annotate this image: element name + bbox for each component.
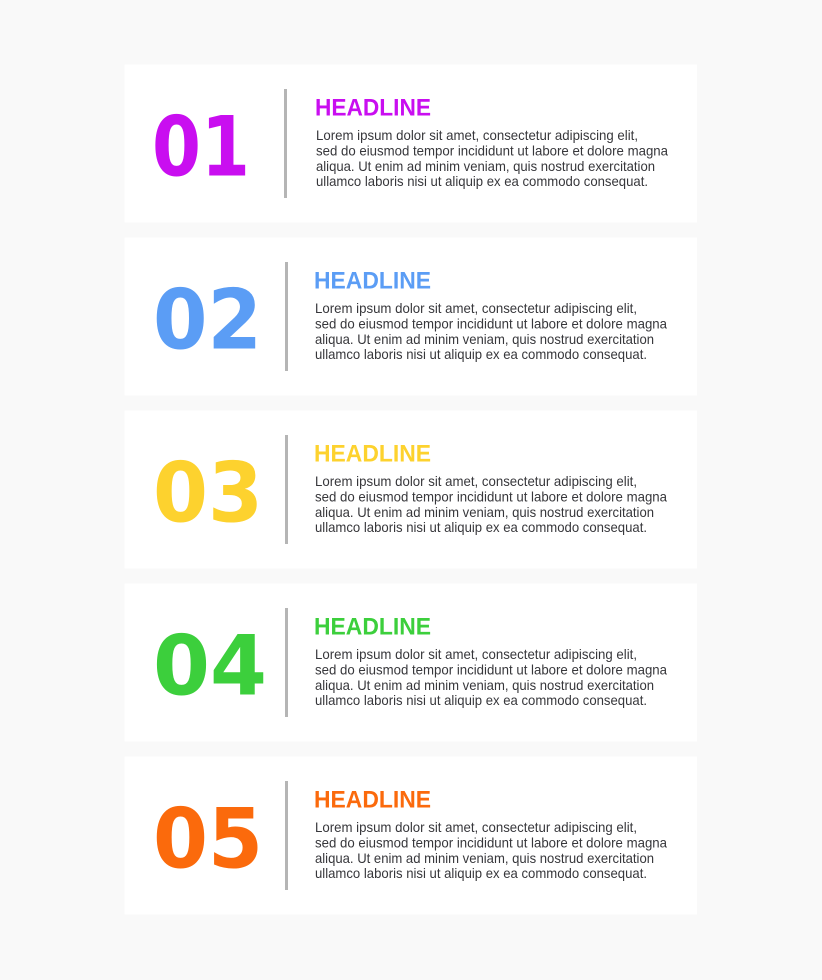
body text: ullamco laboris nisi ut aliquip ex ea commodo consequat. bbox=[315, 693, 647, 708]
number 04: 04 bbox=[153, 618, 267, 714]
body text: sed do eiusmod tempor incididunt ut labore et dolore magna bbox=[315, 836, 667, 850]
vertical divider bbox=[285, 435, 288, 544]
panel: step 02 bbox=[124, 238, 697, 396]
body text: ullamco laboris nisi ut aliquip ex ea commodo consequat. bbox=[315, 866, 647, 881]
panel: step 01 bbox=[124, 64, 697, 222]
headline: HEADLINE bbox=[314, 614, 431, 640]
body text: Lorem ipsum dolor sit amet, consectetur adipiscing elit, bbox=[315, 820, 637, 835]
body text: ullamco laboris nisi ut aliquip ex ea commodo consequat. bbox=[316, 174, 648, 189]
body text: aliqua. Ut enim ad minim veniam, quis nostrud exercitation bbox=[316, 159, 655, 174]
body text: sed do eiusmod tempor incididunt ut labore et dolore magna bbox=[315, 316, 667, 332]
panel: step 05 bbox=[124, 756, 697, 914]
body text: Lorem ipsum dolor sit amet, consectetur adipiscing elit, bbox=[315, 474, 637, 489]
body text bbox=[316, 128, 668, 189]
body text: aliqua. Ut enim ad minim veniam, quis nostrud exercitation bbox=[315, 851, 654, 866]
number 05: 05 bbox=[153, 790, 263, 888]
vertical divider bbox=[284, 89, 287, 198]
headline: HEADLINE bbox=[315, 94, 431, 122]
panel: step 04 bbox=[124, 584, 697, 742]
headline: HEADLINE bbox=[314, 268, 431, 294]
body text: Lorem ipsum dolor sit amet, consectetur adipiscing elit, bbox=[316, 128, 638, 143]
body text bbox=[315, 647, 667, 708]
vertical divider bbox=[285, 262, 288, 371]
number 01: 01 bbox=[152, 98, 250, 196]
number 02: 02 bbox=[153, 272, 262, 368]
headline: HEADLINE bbox=[314, 440, 431, 468]
panel: step 03 bbox=[124, 410, 697, 568]
body text: aliqua. Ut enim ad minim veniam, quis nostrud exercitation bbox=[315, 678, 654, 693]
headline: HEADLINE bbox=[314, 786, 431, 814]
body text: Lorem ipsum dolor sit amet, consectetur adipiscing elit, bbox=[315, 647, 637, 662]
body text: sed do eiusmod tempor incididunt ut labore et dolore magna bbox=[315, 490, 667, 504]
body text: ullamco laboris nisi ut aliquip ex ea commodo consequat. bbox=[315, 520, 647, 535]
body text: aliqua. Ut enim ad minim veniam, quis nostrud exercitation bbox=[315, 505, 654, 520]
vertical divider bbox=[285, 781, 288, 890]
body text bbox=[315, 301, 667, 362]
body text bbox=[315, 820, 667, 881]
body text: sed do eiusmod tempor incididunt ut labore et dolore magna bbox=[316, 144, 668, 158]
body text: ullamco laboris nisi ut aliquip ex ea commodo consequat. bbox=[315, 347, 647, 362]
body text: sed do eiusmod tempor incididunt ut labore et dolore magna bbox=[315, 662, 667, 678]
number 03: 03 bbox=[153, 444, 263, 542]
body text bbox=[315, 474, 667, 535]
vertical divider bbox=[285, 608, 288, 717]
body text: Lorem ipsum dolor sit amet, consectetur adipiscing elit, bbox=[315, 301, 637, 316]
body text: aliqua. Ut enim ad minim veniam, quis nostrud exercitation bbox=[315, 332, 654, 347]
